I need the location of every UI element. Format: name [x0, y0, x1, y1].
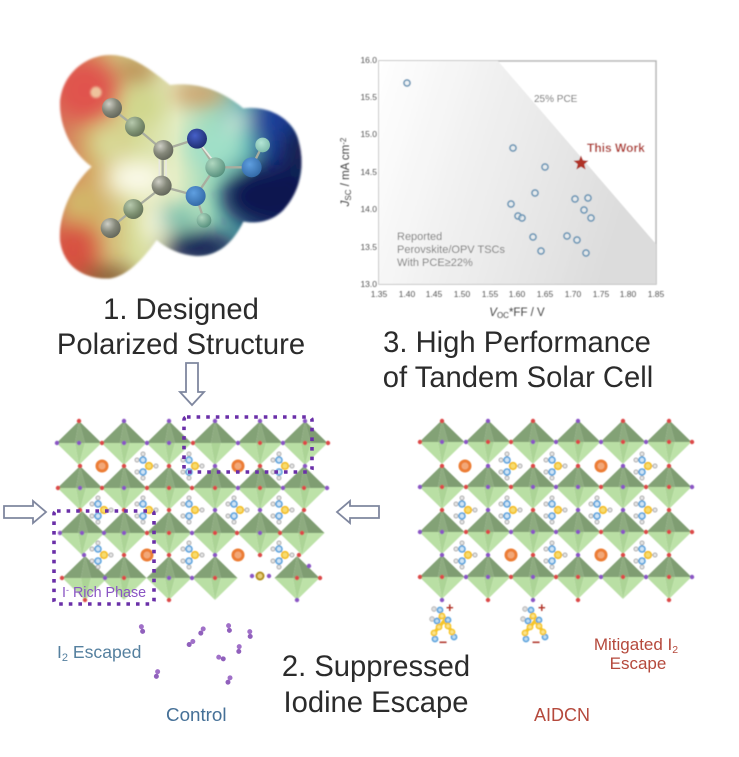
y axis title: J — [340, 200, 352, 207]
y axis tick labels: 14.5 — [360, 167, 377, 177]
iodine rich phase outline: left — [54, 511, 154, 604]
molecule: AIDCN anchored left: − — [439, 634, 447, 650]
x axis tick labels: 1.45 — [426, 289, 443, 299]
x axis tick labels: 1.60 — [509, 289, 526, 299]
data points — [404, 80, 594, 256]
y axis title: / mA cm — [340, 145, 352, 189]
lattice: control perovskite — [56, 421, 328, 600]
y axis tick labels — [360, 55, 377, 289]
octahedra — [56, 421, 328, 600]
shaded region below 25% PCE — [379, 61, 656, 284]
heading: designed polarized structure: 1. Designed — [103, 294, 259, 326]
label: mitigated I2 escape: Mitigated I — [594, 635, 672, 654]
potential surface — [58, 54, 304, 280]
molecule: AIDCN anchored left — [430, 600, 457, 650]
red iodide atoms — [420, 421, 692, 600]
label: mitigated I2 escape: Escape — [610, 654, 666, 673]
label: I2 escaped: 2 — [62, 652, 68, 664]
heading: designed polarized structure: Polarized Structure — [57, 329, 305, 361]
x axis tick labels: 1.85 — [648, 289, 665, 299]
x axis tick labels — [371, 289, 665, 299]
escaped iodine molecules — [138, 623, 253, 685]
x axis tick labels: 1.80 — [620, 289, 637, 299]
label: reported TSCs: Reported — [397, 231, 442, 243]
label: AIDCN: AIDCN — [534, 705, 590, 725]
y axis tick labels: 15.0 — [360, 129, 377, 139]
x axis tick labels: 1.35 — [371, 289, 388, 299]
heading: high performance of tandem solar cell: 3. High Performance — [383, 327, 651, 359]
y axis tick labels: 15.5 — [360, 92, 377, 102]
y axis title: -2 — [339, 137, 348, 145]
octahedra — [420, 420, 692, 599]
molecule: AIDCN anchored right — [521, 600, 548, 650]
x axis tick labels: 1.40 — [399, 289, 416, 299]
y axis tick labels: 16.0 — [360, 55, 377, 65]
x axis tick labels: 1.65 — [537, 289, 554, 299]
cations — [454, 452, 657, 569]
star: this work — [574, 156, 588, 170]
x axis tick labels: 1.70 — [565, 289, 582, 299]
lattice: AIDCN perovskite — [420, 420, 692, 600]
heading: suppressed iodine escape: 2. Suppressed — [282, 651, 470, 683]
x axis tick labels: 1.50 — [454, 289, 471, 299]
label: iodine rich phase: Rich Phase — [69, 585, 146, 601]
x axis tick labels: 1.55 — [482, 289, 499, 299]
ball and stick model — [101, 98, 270, 238]
heading: suppressed iodine escape: Iodine Escape — [284, 687, 468, 719]
x axis title: OC — [497, 311, 509, 320]
label: this work: This Work — [587, 141, 645, 155]
label: mitigated I2 escape: 2 — [672, 644, 678, 656]
label: I2 escaped: I — [57, 642, 62, 662]
arrow: down to control lattice — [180, 363, 204, 405]
label: 25% PCE: 25% PCE — [534, 94, 578, 105]
cations — [90, 452, 294, 569]
label: reported TSCs: Perovskite/OPV TSCs — [397, 244, 505, 256]
y axis tick labels: 13.5 — [360, 242, 377, 252]
purple iodide atoms — [420, 421, 692, 600]
label: control: Control — [166, 704, 227, 725]
highlight — [90, 87, 102, 98]
chart: JSC versus VOC*FF scatter — [339, 55, 665, 320]
icon: electrostatic potential molecule — [58, 54, 304, 280]
x axis title: *FF / V — [509, 307, 545, 319]
y axis tick labels: 14.0 — [360, 204, 377, 214]
label: iodine rich phase: - — [66, 585, 69, 595]
heading: high performance of tandem solar cell: of Tandem Solar Cell — [383, 362, 653, 394]
plot frame — [379, 61, 656, 284]
charge signs: + — [446, 600, 454, 615]
purple iodide atoms — [57, 421, 327, 600]
x axis tick labels: 1.75 — [593, 289, 610, 299]
label: reported TSCs: With PCE≥22% — [397, 257, 473, 269]
iodine rich phase outline: top — [184, 417, 312, 472]
arrow: left to control lattice — [337, 501, 379, 523]
label: I2 escaped: Escaped — [68, 642, 141, 662]
red iodide atoms — [58, 421, 328, 600]
molecule: AIDCN anchored right: − — [532, 634, 540, 650]
label: iodine rich phase: I — [62, 585, 66, 601]
y axis title: SC — [344, 189, 353, 201]
charge signs: + — [538, 600, 546, 615]
x axis title: V — [489, 307, 498, 319]
arrow: right to control lattice — [4, 501, 46, 523]
y axis tick labels: 13.0 — [360, 279, 377, 289]
surface gold atom — [256, 572, 264, 580]
